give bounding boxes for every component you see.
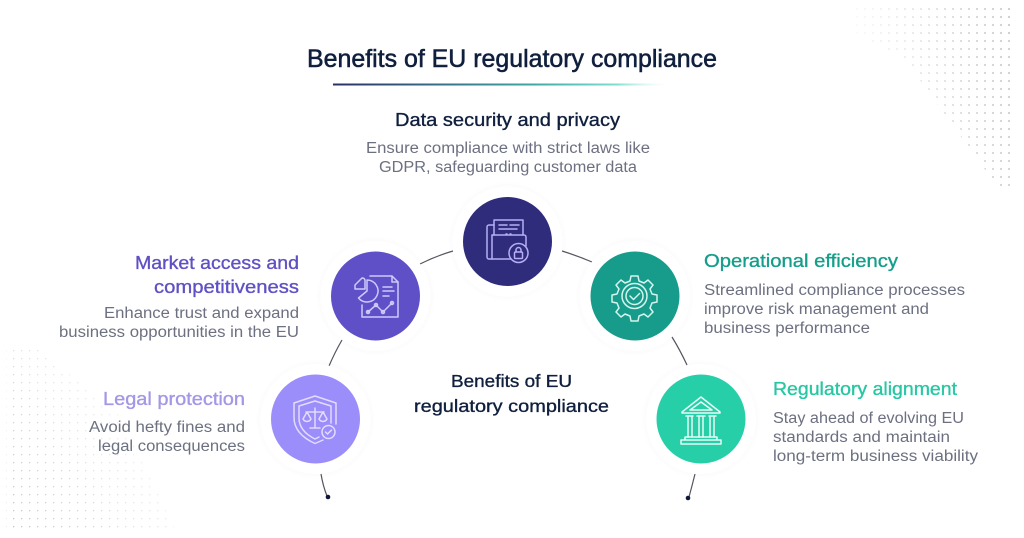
description: legal protection: Avoid hefty fines and — [89, 419, 245, 436]
title: Benefits of EU regulatory compliance — [307, 45, 717, 73]
description: operational efficiency — [704, 282, 965, 337]
description: market access: Enhance trust and expand — [104, 305, 299, 322]
icon: report with pie chart — [320, 241, 430, 351]
panel: regulatory alignment — [646, 364, 978, 474]
decorative dot pattern: bottom left — [6, 350, 176, 530]
description: data security: Ensure compliance with strict laws like — [366, 140, 650, 157]
heading: market access — [135, 252, 299, 297]
description: legal protection — [89, 419, 245, 455]
connector arc segments — [321, 251, 695, 497]
description: legal protection: legal consequences — [98, 438, 245, 455]
description: data security — [366, 140, 650, 176]
heading: legal protection: Legal protection — [103, 388, 245, 409]
heading: market access: Market access and — [135, 252, 299, 273]
panel: market access and competitiveness — [59, 241, 430, 351]
description: operational efficiency: business performance — [704, 320, 870, 337]
heading: operational efficiency: Operational efficiency — [704, 250, 899, 271]
heading: regulatory alignment: Regulatory alignment — [773, 378, 957, 399]
description: market access — [59, 305, 299, 341]
description: regulatory alignment: Stay ahead of evolving EU — [773, 410, 964, 427]
description: regulatory alignment — [773, 410, 978, 465]
description: regulatory alignment: long-term business viability — [773, 448, 978, 465]
decorative dot pattern: top right — [872, 8, 1010, 186]
description: operational efficiency: Streamlined compliance processes — [704, 282, 965, 299]
description: market access: business opportunities in the EU — [59, 324, 299, 341]
panel: operational efficiency — [580, 241, 965, 351]
icon: classical bank building — [646, 364, 756, 474]
title underline — [333, 84, 668, 86]
panel: data security and privacy — [366, 109, 650, 296]
icon: gear with check — [580, 241, 690, 351]
connector end dot: right — [686, 496, 690, 500]
panel: legal protection — [89, 364, 370, 474]
description: regulatory alignment: standards and maintain — [773, 429, 950, 446]
connector end dot: left — [326, 495, 330, 499]
heading: market access: competitiveness — [154, 276, 299, 297]
center label — [414, 371, 609, 416]
description: operational efficiency: improve risk management and — [704, 301, 929, 318]
center label: Benefits of EU — [451, 371, 572, 391]
heading: data security: Data security and privacy — [395, 109, 621, 130]
icon: shield with scales — [260, 364, 370, 474]
description: data security: GDPR, safeguarding customer data — [379, 159, 637, 176]
center label: regulatory compliance — [414, 396, 609, 416]
icon: folder with padlock — [452, 186, 562, 296]
